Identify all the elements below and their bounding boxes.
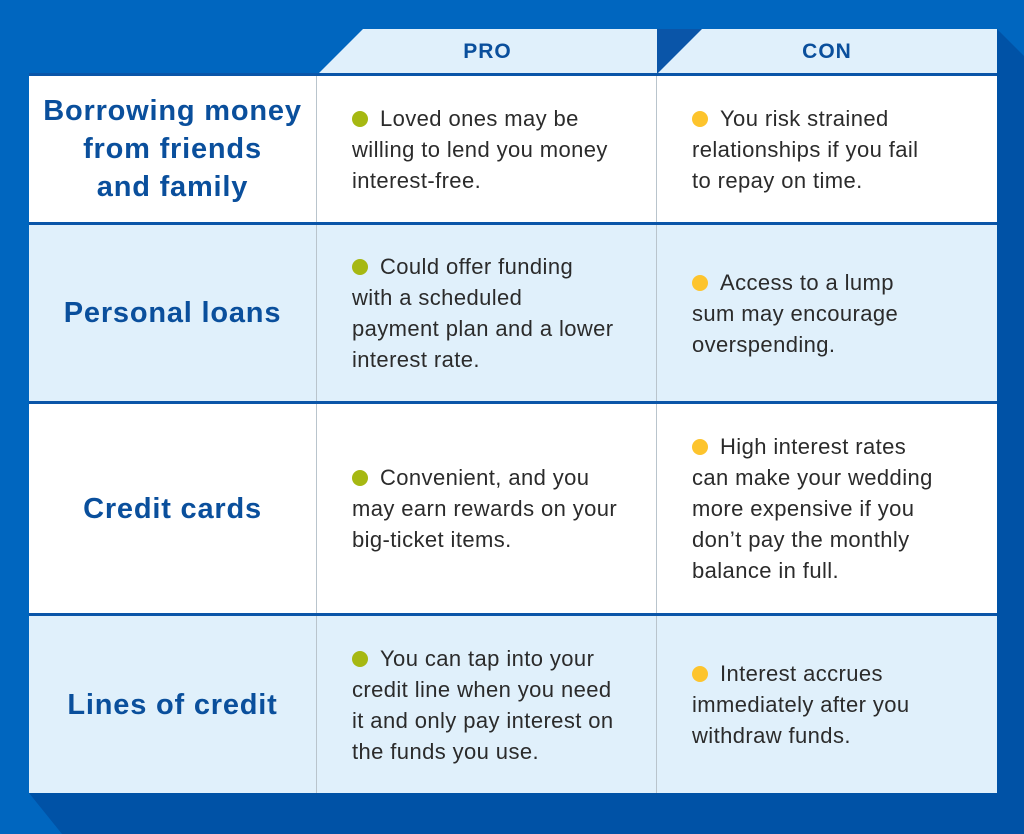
title: Borrowing money from friends and family: from friends bbox=[83, 133, 262, 165]
con text bbox=[692, 434, 933, 583]
pro text: willing to lend you money bbox=[352, 136, 608, 162]
title: Borrowing money from friends and family: and family bbox=[97, 171, 248, 203]
pro text: interest-free. bbox=[352, 168, 481, 192]
header: CON bbox=[657, 29, 997, 73]
title: Personal loans: Personal loans bbox=[64, 297, 281, 329]
pro text: Loved ones may be bbox=[380, 106, 579, 130]
header: CON: CON bbox=[802, 40, 852, 63]
pro text: credit line when you need bbox=[352, 676, 612, 702]
con text: withdraw funds. bbox=[692, 723, 851, 748]
pro text: it and only pay interest on bbox=[352, 708, 614, 732]
header: PRO: PRO bbox=[463, 40, 512, 63]
con text: more expensive if you bbox=[692, 496, 914, 521]
con text: Interest accrues bbox=[720, 661, 883, 686]
con text: relationships if you fail bbox=[692, 136, 918, 162]
con text: balance in full. bbox=[692, 558, 839, 583]
con text: don’t pay the monthly bbox=[692, 527, 910, 552]
con text: immediately after you bbox=[692, 692, 910, 717]
title: Lines of credit bbox=[29, 616, 317, 793]
con text: High interest rates bbox=[720, 434, 906, 459]
title: Borrowing money from friends and family bbox=[29, 76, 317, 222]
title: Lines of credit: Lines of credit bbox=[67, 688, 278, 720]
title: Credit cards: Credit cards bbox=[83, 492, 262, 524]
con text: Access to a lump bbox=[720, 270, 894, 294]
row: credit cards bbox=[29, 404, 997, 613]
pro text: interest rate. bbox=[352, 347, 480, 372]
pro text: the funds you use. bbox=[352, 738, 539, 764]
pro text: You can tap into your bbox=[380, 646, 594, 670]
con text bbox=[692, 106, 918, 192]
title: Borrowing money from friends and family: Borrowing money bbox=[43, 95, 302, 127]
pro text: may earn rewards on your bbox=[352, 496, 617, 521]
header: PRO bbox=[319, 29, 657, 73]
pro text: with a scheduled bbox=[352, 285, 522, 310]
con text: sum may encourage bbox=[692, 300, 898, 326]
con text: You risk strained bbox=[720, 106, 889, 130]
con text: to repay on time. bbox=[692, 168, 863, 192]
con text bbox=[692, 270, 898, 356]
row: friends and family bbox=[29, 76, 997, 222]
con text: can make your wedding bbox=[692, 465, 933, 490]
con text bbox=[692, 661, 910, 748]
row: personal loans bbox=[29, 225, 997, 401]
pro text bbox=[317, 616, 657, 793]
title: Personal loans bbox=[29, 225, 317, 401]
pro text: big-ticket items. bbox=[352, 527, 512, 552]
pro text: Could offer funding bbox=[380, 254, 573, 279]
con text: overspending. bbox=[692, 332, 835, 356]
pro text bbox=[317, 404, 657, 613]
pro text bbox=[317, 76, 657, 222]
row: lines of credit bbox=[29, 616, 997, 793]
title: Credit cards bbox=[29, 404, 317, 613]
pro text: payment plan and a lower bbox=[352, 316, 614, 341]
pro text bbox=[317, 225, 657, 401]
pro text: Convenient, and you bbox=[380, 465, 589, 490]
